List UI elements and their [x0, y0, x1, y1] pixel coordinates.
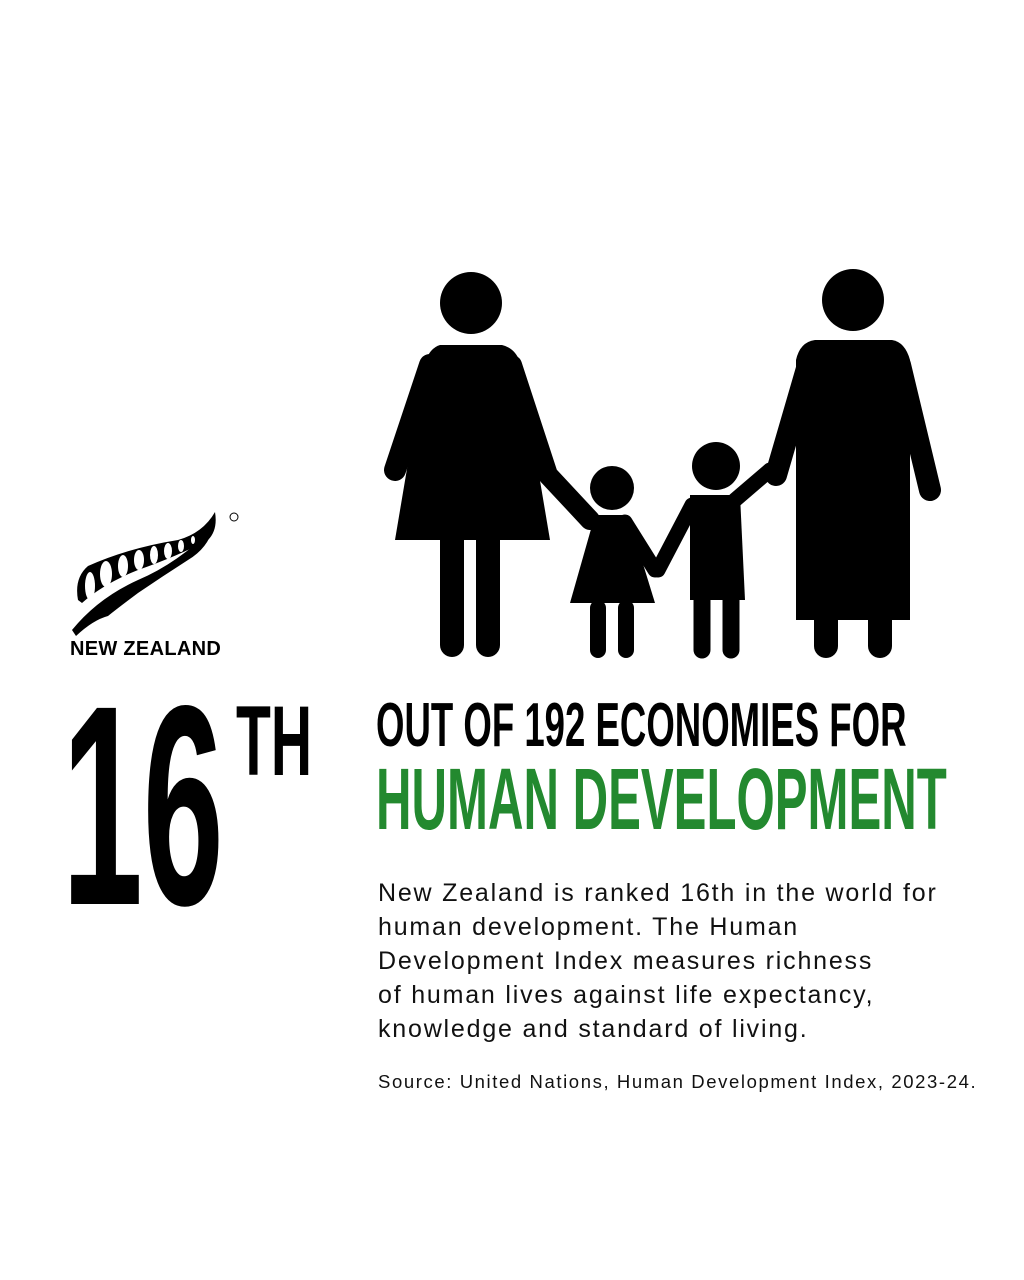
body text: human development. The Human: [378, 913, 799, 941]
body text: knowledge and standard of living.: [378, 1015, 808, 1043]
heading: [376, 691, 947, 848]
rank number 16th: TH: [236, 686, 312, 797]
body text: [378, 879, 938, 1043]
boy: [658, 442, 770, 650]
girl: [570, 466, 655, 650]
source: Source: United Nations, Human Development Index, 2023-24.: [378, 1071, 977, 1092]
logo: New Zealand fern: [70, 512, 238, 660]
fern upper band with white leaflets: [77, 512, 216, 603]
logo: New Zealand fern: NEW ZEALAND: [70, 638, 221, 660]
man: [776, 269, 930, 646]
body text: New Zealand is ranked 16th in the world for: [378, 879, 938, 907]
body text: of human lives against life expectancy,: [378, 981, 874, 1009]
fern lower leaflets and stem: [72, 528, 213, 636]
illustration: family holding hands: [384, 269, 941, 658]
rank number 16th: 16: [62, 647, 224, 965]
rank number 16th: [62, 647, 312, 965]
heading: HUMAN DEVELOPMENT: [376, 751, 947, 848]
body text: Development Index measures richness: [378, 947, 873, 975]
heading: OUT OF 192 ECONOMIES FOR: [376, 691, 906, 760]
woman: [395, 272, 590, 645]
